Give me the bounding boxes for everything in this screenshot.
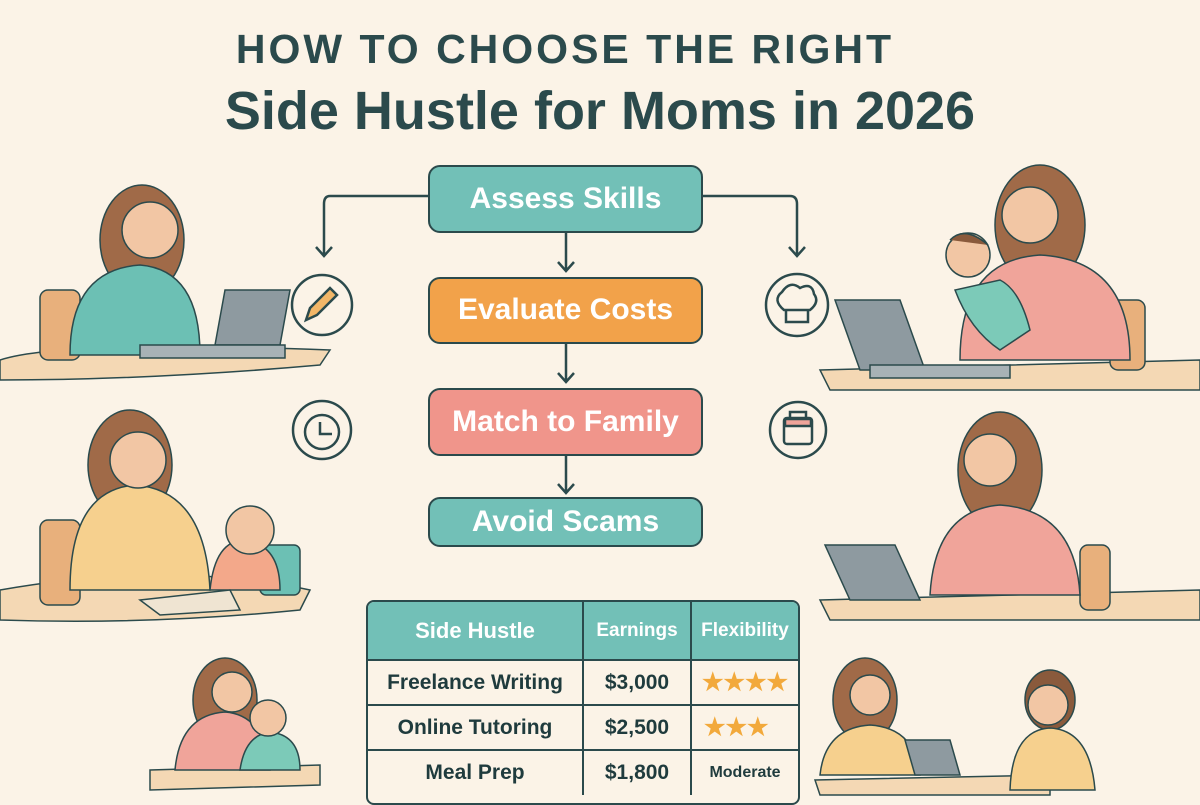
icon: calendar <box>770 402 826 458</box>
icon: pencil <box>292 275 352 335</box>
icon: clock <box>293 401 351 459</box>
table: $1,800 <box>605 761 669 784</box>
icon: chef hat <box>766 274 828 336</box>
subtitle: Side Hustle for Moms in 2026 <box>225 81 975 141</box>
table: Flexibility <box>701 620 789 640</box>
illustrations <box>0 165 1200 795</box>
step: match to family <box>428 388 703 456</box>
step: match to family: Match to Family <box>452 405 679 438</box>
table: Freelance Writing <box>387 670 563 694</box>
step: evaluate costs <box>428 277 703 344</box>
table: $2,500 <box>605 716 669 738</box>
step: avoid scams: Avoid Scams <box>472 505 659 538</box>
table: Earnings <box>596 620 678 640</box>
step: avoid scams <box>428 497 703 547</box>
title: HOW TO CHOOSE THE RIGHT <box>236 26 894 72</box>
step: assess skills: Assess Skills <box>470 182 661 215</box>
step: evaluate costs: Evaluate Costs <box>458 293 673 326</box>
table: Moderate <box>709 764 781 781</box>
table: ★★★ <box>704 714 769 741</box>
table: ★★★★ <box>702 669 788 696</box>
table: $3,000 <box>605 670 669 694</box>
table: Online Tutoring <box>398 716 552 738</box>
table: Meal Prep <box>425 761 525 784</box>
table <box>366 600 800 805</box>
step: assess skills <box>428 165 703 233</box>
table: Side Hustle <box>415 618 535 642</box>
